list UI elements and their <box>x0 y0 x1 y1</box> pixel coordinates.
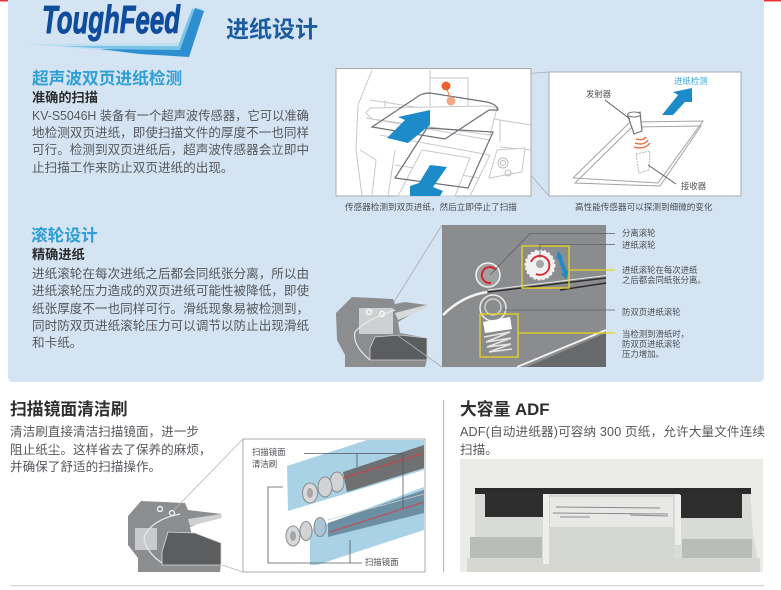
roller labels <box>622 228 706 359</box>
icon: receiver <box>636 151 650 173</box>
label: brush: 扫描镜面 <box>252 447 286 457</box>
illustration: sensor close-up <box>549 72 741 196</box>
text block: cleaning brush: 清洁刷直接清洁扫描镜面，进一步 <box>10 424 199 439</box>
upper glass plate <box>287 440 424 511</box>
roller labels: 防双页进纸滚轮 <box>622 339 681 349</box>
icon: signal waves <box>634 137 650 148</box>
illustration: scanner with double feed <box>336 68 531 196</box>
icon: spring <box>483 317 512 352</box>
roller labels: 压力增加。 <box>622 349 664 359</box>
icon: separation roller <box>476 263 500 287</box>
text block: cleaning brush: 扫描镜面清洁刷 <box>10 399 127 419</box>
bottom rule <box>10 585 764 586</box>
text block: cleaning brush: 阻止纸尘。这样省去了保养的麻烦， <box>10 442 212 457</box>
vertical divider <box>443 400 444 572</box>
connector lines to brush detail <box>172 439 243 572</box>
icon: anti double feed roller <box>480 295 506 321</box>
text block: cleaning brush <box>10 399 212 474</box>
icon: blue double arrow <box>556 251 569 279</box>
icon: emitter <box>628 112 642 134</box>
roller labels: 之后都会同纸张分离。 <box>622 275 706 285</box>
roller labels: 进纸滚轮 <box>622 240 656 250</box>
panel: paper feed design <box>8 0 764 382</box>
text block: roller design: 进纸滚轮压力造成的双页进纸可能性被降低，即使 <box>32 283 309 298</box>
text block: ultrasonic detection: 止扫描工作来防止双页进纸的出现。 <box>32 160 234 175</box>
text block: high capacity ADF: 大容量 ADF <box>460 399 550 419</box>
text block: ultrasonic detection: 可行。检测到双页进纸后，超声波传感器会立即中 <box>32 142 309 157</box>
arrow: paper out <box>410 165 447 196</box>
icon: scanner side view, brush <box>128 501 222 572</box>
top red rule <box>0 0 781 2</box>
text block: ultrasonic detection: 地检测双页进纸，即使扫描文件的厚度不一也同样 <box>32 125 309 140</box>
text block: roller design: 精确进纸 <box>32 246 85 262</box>
text block: roller design <box>31 225 309 350</box>
caption: right illustration: 高性能传感器可以探测到细微的变化 <box>575 201 713 212</box>
label: feed detection: 进纸检测 <box>674 76 708 86</box>
text block: high capacity ADF: ADF(自动进纸器)可容纳 300 页纸，允许大量文件连续 <box>460 424 765 439</box>
upper brush roller <box>302 445 424 503</box>
roller labels: 进纸滚轮在每次进纸 <box>622 265 698 275</box>
text block: roller design: 滚轮设计 <box>31 225 98 245</box>
icon: orange sensor dots <box>442 82 456 106</box>
text block: high capacity ADF <box>460 399 765 457</box>
label: glass: 扫描镜面 <box>365 557 398 567</box>
text block: high capacity ADF: 扫描。 <box>460 443 498 457</box>
text block: cleaning brush: 并确保了舒适的扫描操作。 <box>10 459 161 474</box>
yellow callout frames <box>480 246 569 357</box>
roller labels: 防双页进纸滚轮 <box>622 307 681 317</box>
illustration: brush detail: 清洁刷 <box>252 459 277 469</box>
leader lines <box>490 234 615 310</box>
logo: ToughFeed <box>26 0 204 57</box>
label: emitter: 发射器 <box>586 89 612 99</box>
connector lines to roller detail <box>394 225 442 367</box>
icon: scanner side view <box>336 297 427 367</box>
text block: roller design: 和卡纸。 <box>32 336 82 350</box>
photo: ADF tray <box>460 459 763 572</box>
lower glass plate <box>310 487 424 565</box>
caption: left illustration: 传感器检测到双页进纸，然后立即停止了扫描 <box>345 201 517 212</box>
text block: roller design: 纸张厚度不一也同样可行。滑纸现象易被检测到， <box>32 301 309 316</box>
main heading: 进纸设计 <box>226 16 318 42</box>
illustration: brush detail <box>243 439 425 572</box>
text block: roller design: 同时防双页进纸滚轮压力可以调节以防止出现滑纸 <box>32 318 309 333</box>
text block: roller design: 进纸滚轮在每次进纸之后都会同纸张分离，所以由 <box>32 266 309 281</box>
arrow: feed direction <box>662 88 692 115</box>
icon: feed roller <box>526 250 554 280</box>
illustration: roller detail <box>442 225 606 367</box>
text block: ultrasonic detection: 超声波双页进纸检测 <box>32 68 182 88</box>
text block: ultrasonic detection: 准确的扫描 <box>32 89 98 105</box>
arrow: paper in <box>387 110 430 143</box>
label: receiver: 接收器 <box>681 181 707 191</box>
lower brush roller <box>286 490 424 546</box>
roller labels: 分离滚轮 <box>622 228 656 238</box>
roller labels: 当检测到滑纸时， <box>622 329 689 339</box>
leader lines <box>268 454 403 563</box>
text block: ultrasonic detection <box>32 68 309 175</box>
text block: ultrasonic detection: KV-S5046H 装备有一个超声波传感器，它可以准确 <box>32 108 309 123</box>
logo: ToughFeed: ToughFeed <box>42 0 181 42</box>
connector lines between illustrations <box>468 72 549 196</box>
